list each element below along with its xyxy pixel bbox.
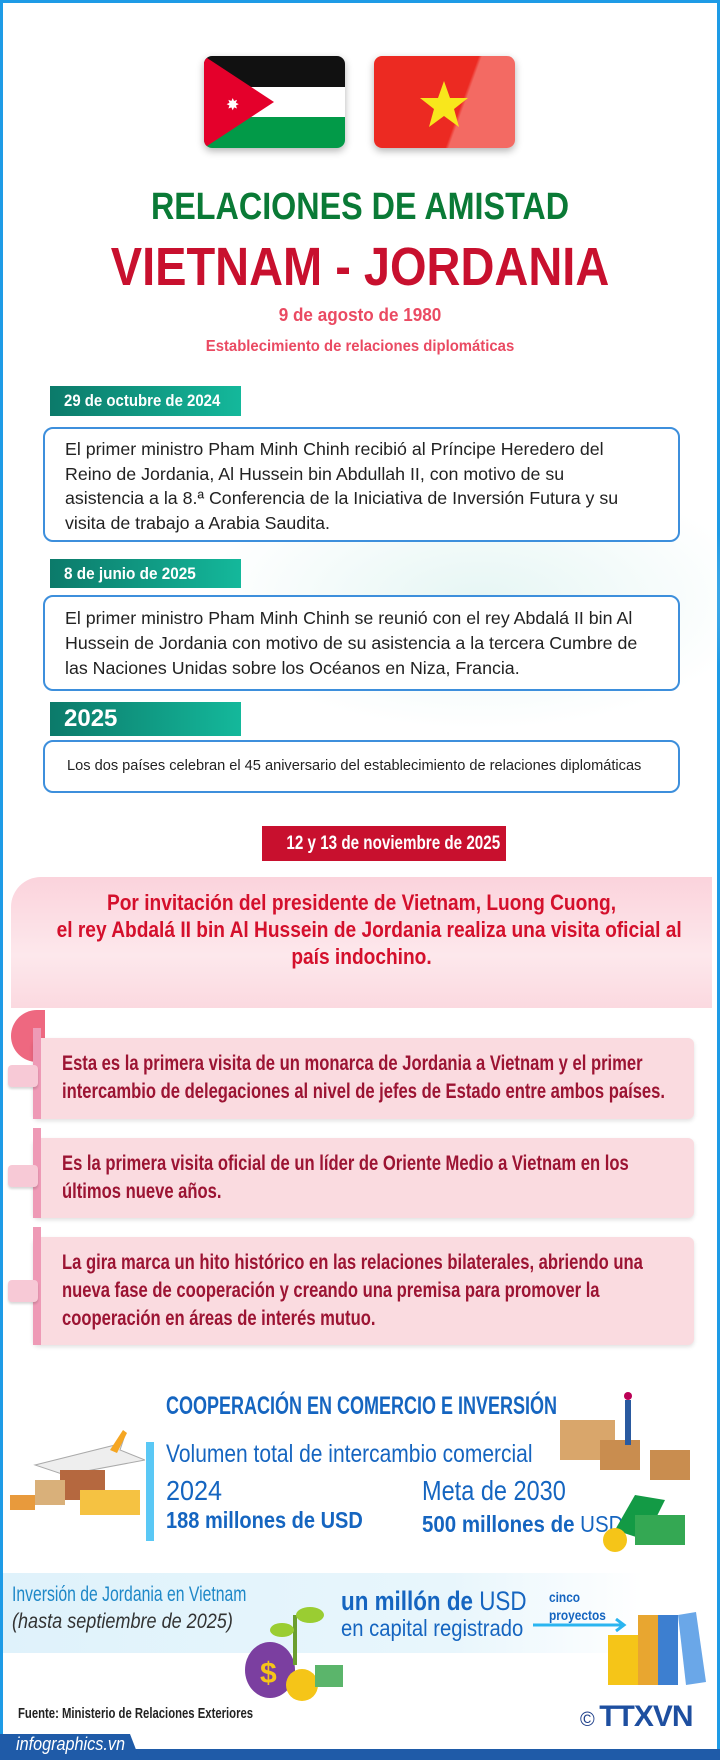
main title: VIETNAM - JORDANIA (111, 237, 609, 297)
flag: Jordan (204, 56, 345, 148)
flag: Jordan: ✸ (226, 97, 239, 114)
date banner: 12 y 13 de noviembre de 2025 (286, 833, 500, 854)
tag 2 (50, 559, 241, 588)
background decoration (200, 470, 720, 730)
subtitle: Establecimiento de relaciones diplomáticas (206, 338, 514, 355)
icon: boxes and workers (560, 1392, 690, 1552)
arrow (533, 1618, 626, 1632)
icon: plane and trucks (10, 1430, 145, 1515)
icon: money bag plant (245, 1607, 343, 1701)
flag: Vietnam (374, 56, 515, 148)
item 2: últimos nueve años. (62, 1180, 221, 1203)
logo: TTXVN: © TTXVN (580, 1700, 693, 1733)
date banner (262, 826, 506, 861)
text: investment (12, 1583, 246, 1633)
label: five projects: proyectos (549, 1607, 606, 1623)
label: five projects (549, 1589, 606, 1623)
decoration: pink half circle (11, 1010, 45, 1062)
item 3: cooperación en áreas de interés mutuo. (62, 1307, 375, 1330)
stat 2030: 500 millones de USD (422, 1511, 623, 1537)
source: Fuente: Ministerio de Relaciones Exteriores (18, 1706, 253, 1722)
item 3: La gira marca un hito histórico en las relaciones bilaterales, abriendo una (62, 1251, 643, 1274)
heading: cooperation: COOPERACIÓN EN COMERCIO E INVERSIÓN (166, 1392, 557, 1420)
tag 3 (50, 702, 241, 736)
text: volume: Volumen total de intercambio comercial (166, 1440, 533, 1468)
stat 2030 (422, 1475, 623, 1537)
panel: invitation: el rey Abdalá II bin Al Hussein de Jordania realiza una visita oficial al (57, 917, 682, 942)
item 3 (33, 1237, 694, 1345)
tag 1 (50, 386, 241, 416)
box 1: visita de trabajo a Arabia Saudita. (65, 512, 330, 532)
item 2 (33, 1138, 694, 1218)
tag 2: 8 de junio de 2025 (64, 564, 196, 583)
panel: invitation: país indochino. (291, 944, 432, 969)
stat 2024: 2024 (166, 1475, 222, 1506)
box 3 (43, 740, 680, 793)
footer (0, 1749, 720, 1760)
box 2 (43, 595, 680, 691)
box 1: Reino de Jordania, Al Hussein bin Abdullah II, con motivo de su (65, 464, 564, 484)
box 2: El primer ministro Pham Minh Chinh se reunió con el rey Abdalá II bin Al (65, 608, 632, 628)
title: RELACIONES DE AMISTAD (151, 186, 569, 228)
tag 3: 2025 (64, 705, 117, 732)
text: investment: (hasta septiembre de 2025) (12, 1610, 233, 1633)
stat: one million: un millón de USD (341, 1586, 527, 1616)
item 1: Esta es la primera visita de un monarca de Jordania a Vietnam y el primer (62, 1052, 643, 1075)
tag 1: 29 de octubre de 2024 (64, 391, 220, 410)
item 3: nueva fase de cooperación y creando una premisa para promover la (62, 1279, 600, 1302)
stat 2024 (166, 1475, 363, 1533)
box 1 (43, 427, 680, 542)
bar (146, 1442, 154, 1541)
panel: invitation: Por invitación del presidente de Vietnam, Luong Cuong, (107, 890, 616, 915)
box 1: asistencia a la 8.ª Conferencia de la Iniciativa de Inversión Futura y su (65, 488, 618, 508)
stat: one million (341, 1586, 527, 1641)
item 1: intercambio de delegaciones al nivel de jefes de Estado entre ambos países. (62, 1080, 665, 1103)
footer text: infographics.vn (16, 1734, 125, 1754)
label: five projects: cinco (549, 1589, 580, 1605)
panel: invitation (11, 877, 712, 1008)
stat 2030: Meta de 2030 (422, 1475, 566, 1506)
icon: folders (608, 1612, 706, 1685)
box 2: Hussein de Jordania con motivo de su asistencia a la tercera Cumbre de (65, 633, 637, 653)
icon: money bag plant: $ (260, 1657, 277, 1690)
band: investment (3, 1573, 643, 1653)
stat: one million: en capital registrado (341, 1615, 523, 1641)
box 3: Los dos países celebran el 45 aniversario del establecimiento de relaciones diplomáticas (67, 758, 641, 774)
item 1 (33, 1038, 694, 1119)
text: investment: Inversión de Jordania en Vietnam (12, 1583, 246, 1606)
box 2: las Naciones Unidas sobre los Océanos en Niza, Francia. (65, 658, 520, 678)
stat 2024: 188 millones de USD (166, 1507, 363, 1533)
item 2: Es la primera visita oficial de un líder de Oriente Medio a Vietnam en los (62, 1152, 629, 1175)
box 1: El primer ministro Pham Minh Chinh recibió al Príncipe Heredero del (65, 439, 604, 459)
date: 9 de agosto de 1980 (279, 305, 441, 325)
